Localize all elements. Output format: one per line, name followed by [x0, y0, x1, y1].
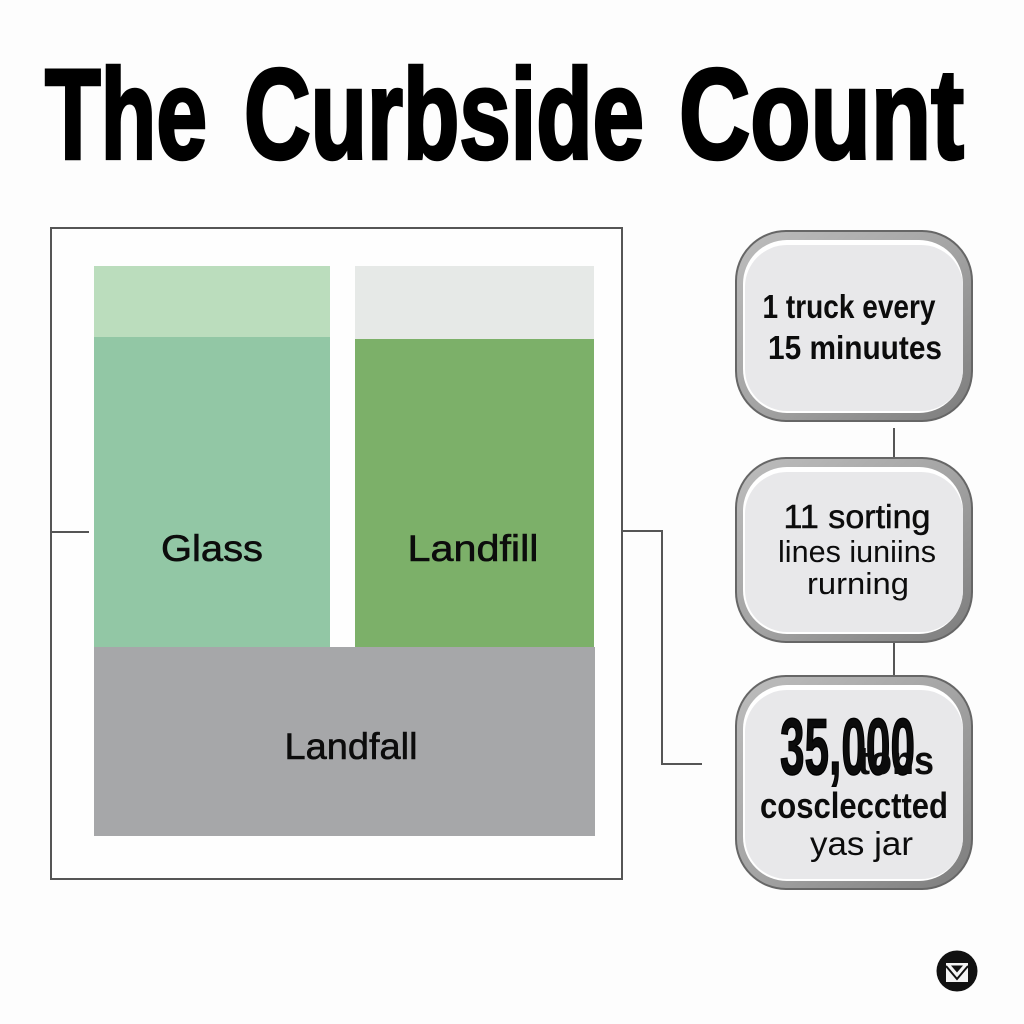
card: tons collected: cosclecctted — [760, 785, 948, 826]
card: tons collected: 35,000 — [780, 702, 915, 791]
connector: card 1 to card 2 — [893, 428, 895, 458]
card: tons collected: tons — [858, 739, 934, 783]
card: sorting lines — [736, 458, 972, 642]
card: tons collected — [736, 676, 972, 889]
landfill gray segment: Landfall — [284, 726, 418, 767]
card: sorting lines: lines iuniins — [778, 534, 936, 569]
title: Curbside — [244, 44, 644, 186]
panel: treemap chart — [51, 228, 622, 879]
connector: card 2 to card 3 — [893, 642, 895, 676]
landfill green segment — [355, 266, 594, 647]
card: truck frequency — [736, 231, 972, 421]
connector: left tick — [51, 531, 89, 533]
card: sorting lines: 11 sorting — [784, 498, 930, 535]
card: tons collected: yas jar — [810, 825, 913, 862]
glass segment: Glass — [161, 528, 263, 569]
glass segment — [94, 266, 330, 647]
landfill gray segment — [94, 647, 595, 836]
card: truck frequency: 1 truck every — [762, 288, 936, 325]
title: The — [45, 44, 207, 186]
card: truck frequency: 15 minuutes — [768, 329, 942, 366]
card: sorting lines: rurning — [807, 566, 909, 601]
icon: envelope badge — [936, 950, 978, 992]
title — [45, 44, 964, 186]
connector: chart to tons card — [622, 531, 702, 764]
landfill green segment: Landfill — [408, 528, 538, 569]
